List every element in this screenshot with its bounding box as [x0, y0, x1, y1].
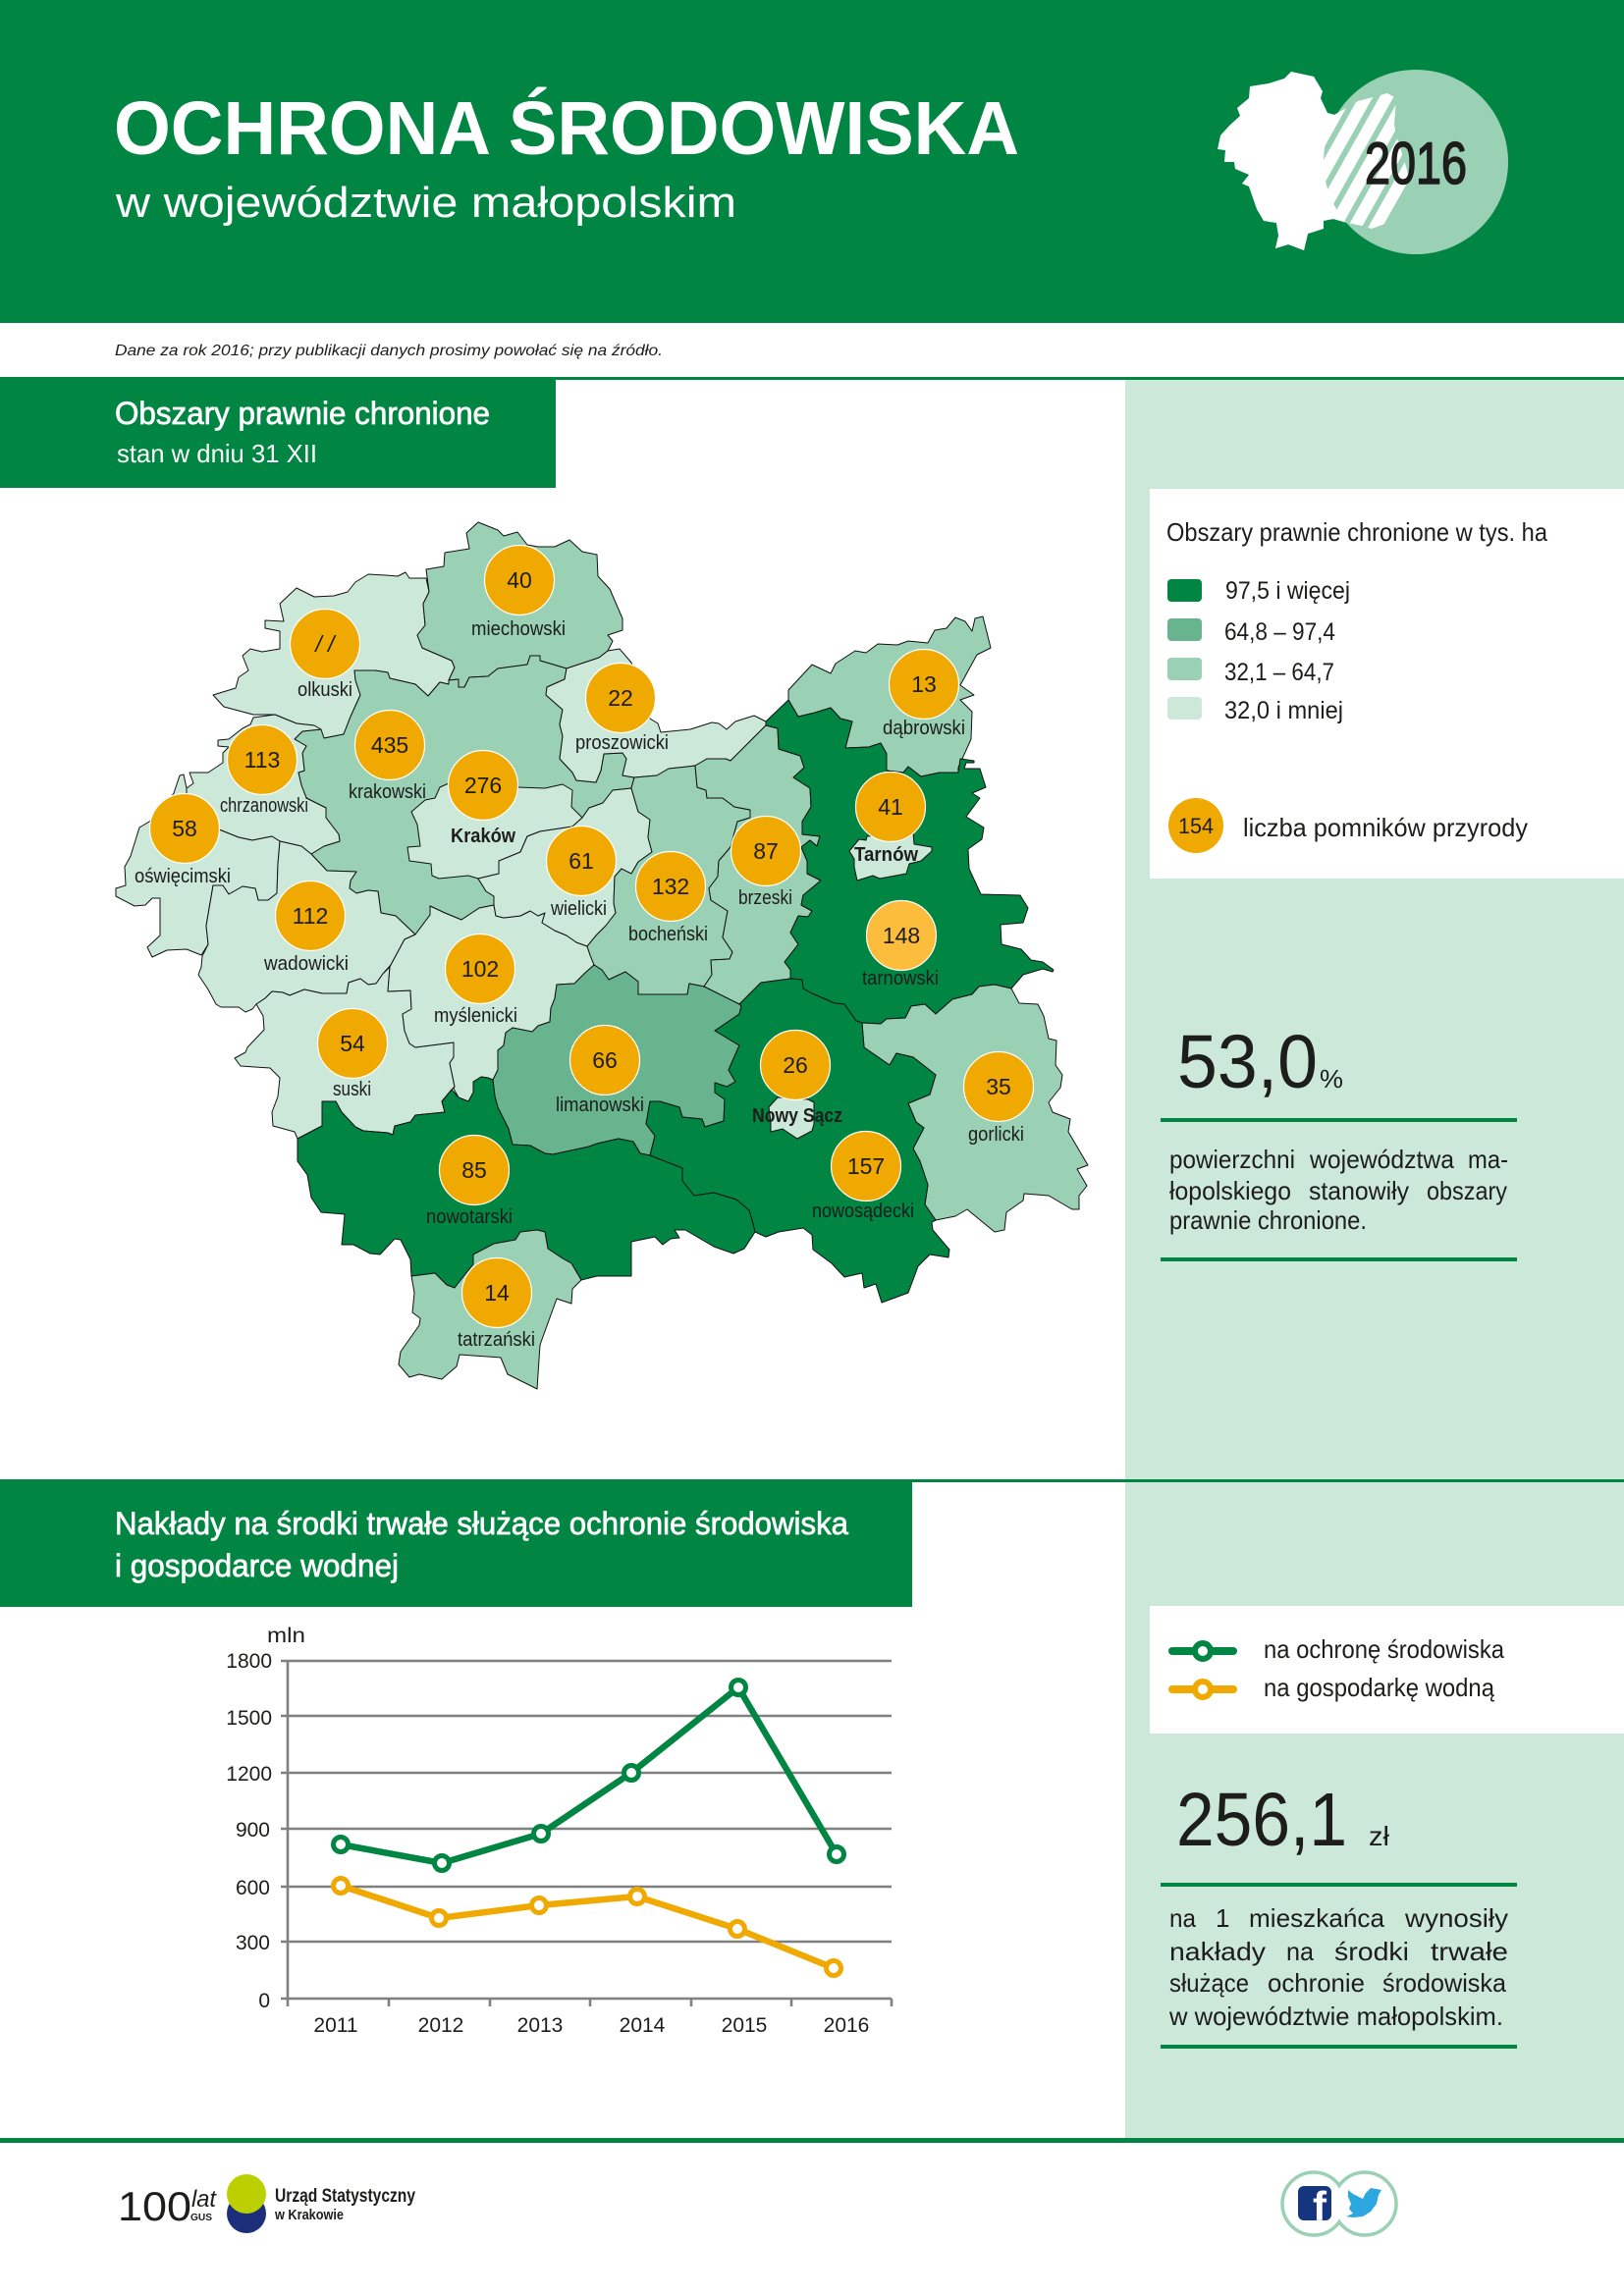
- county: dąbrowski: [788, 616, 991, 776]
- y axis labels: [226, 1650, 272, 2012]
- x axis labels: 2013: [517, 2014, 563, 2037]
- legend: map: 32,0 i mniej: [1224, 697, 1343, 724]
- county name labels: dąbrowski: [883, 718, 965, 739]
- badge: olkuski: [291, 609, 359, 679]
- badge: bocheński: [636, 852, 705, 921]
- badge: suski: 54: [340, 1031, 365, 1056]
- city name labels: Kraków: [451, 826, 515, 847]
- county: Nowy Sącz city: [769, 1097, 814, 1139]
- badge: tatrzański: [461, 1258, 532, 1327]
- source note: Dane za rok 2016; przy publikacji danych prosimy powołać się na źródło.: [115, 343, 663, 359]
- stat: 53,0%: prawnie chronione.: [1169, 1205, 1367, 1235]
- county: suski: [235, 967, 455, 1139]
- county name labels: oświęcimski: [135, 866, 231, 887]
- county name labels: myślenicki: [434, 1005, 517, 1027]
- legend: map: liczba pomników przyrody: [1243, 813, 1528, 842]
- stat: 256,1 zł: [1161, 1778, 1517, 2049]
- legend: map: 97,5 i więcej: [1225, 577, 1350, 605]
- stat: 53,0%: województwa: [1309, 1145, 1455, 1174]
- county: bocheński: [587, 766, 750, 994]
- badge: tatrzański: 14: [484, 1280, 510, 1306]
- county name labels: wielicki: [550, 898, 607, 920]
- badge: nowotarski: 85: [461, 1157, 487, 1183]
- county: wadowicki: [198, 841, 415, 1012]
- badge: dąbrowski: [890, 650, 958, 719]
- legend: map: [1150, 489, 1624, 879]
- badge: Nowy Sącz: [760, 1031, 831, 1099]
- badge: krakowski: 435: [371, 732, 408, 758]
- badge: chrzanowski: 113: [244, 747, 280, 773]
- series: ochrona środowiska: [334, 1681, 844, 1871]
- icons: social media: [1282, 2172, 1396, 2235]
- stat: 53,0%: łopolskiego: [1169, 1176, 1291, 1205]
- icon: region silhouette with 2016 badge: [1218, 70, 1508, 254]
- y axis labels: 300: [236, 1932, 270, 1954]
- footer logo: 100 lat GUS: GUS: [190, 2213, 212, 2223]
- county: nowotarski: [298, 1077, 755, 1288]
- footer logo: 100 lat GUS: [118, 2183, 217, 2229]
- county: olkuski: [213, 572, 455, 738]
- x axis labels: 2015: [722, 2014, 767, 2037]
- badge: nowotarski: [440, 1135, 509, 1205]
- y axis labels: 0: [258, 1990, 270, 2012]
- county name labels: chrzanowski: [220, 795, 308, 817]
- county: wielicki: [478, 788, 652, 946]
- badge: krakowski: [355, 711, 424, 779]
- x axis labels: 2012: [418, 2014, 463, 2037]
- badge: Nowy Sącz: 26: [783, 1052, 808, 1078]
- y axis labels: 1800: [226, 1650, 272, 1673]
- badge: limanowski: 66: [592, 1047, 618, 1073]
- city name labels: Nowy Sącz: [752, 1105, 842, 1127]
- badge: myślenicki: 102: [461, 956, 499, 982]
- footer logo: 100 lat GUS: 100: [118, 2183, 191, 2229]
- county name labels: olkuski: [298, 679, 352, 701]
- map value badges: [149, 546, 1033, 1327]
- stat: 256,1 zł: zł: [1369, 1821, 1390, 1851]
- stat: 53,0%: 53,0: [1177, 1020, 1318, 1104]
- footer logo: Urząd Statystyczny w Krakowie: [227, 2174, 415, 2233]
- stat: 53,0%: [1161, 1020, 1517, 1261]
- badge: limanowski: [569, 1025, 640, 1095]
- series: gospodarka wodna: [334, 1879, 840, 1975]
- badge: miechowski: 40: [507, 567, 532, 593]
- badge: oświęcimski: [149, 793, 220, 864]
- stat: 256,1 zł: środki: [1334, 1937, 1409, 1966]
- footer logo: Urząd Statystyczny w Krakowie: Urząd Statystyczny: [275, 2186, 415, 2207]
- stat: 256,1 zł: ochronie: [1268, 1968, 1365, 1998]
- county: tarnowski: [766, 700, 1054, 1024]
- heading: investment outlays: [0, 1482, 912, 1607]
- county: krakowski: [295, 656, 634, 934]
- badge: tarnowski: 148: [883, 923, 920, 948]
- badge: Kraków: [448, 750, 518, 821]
- right side panel background: [1125, 378, 1624, 2139]
- choropleth map of counties: [116, 522, 1088, 1389]
- legend: map: 64,8 – 97,4: [1224, 618, 1335, 646]
- county: miechowski: [417, 522, 623, 687]
- county name labels: miechowski: [471, 618, 566, 640]
- county name labels: krakowski: [349, 781, 426, 803]
- badge: olkuski: / /: [313, 631, 337, 657]
- heading: investment outlays: i gospodarce wodnej: [115, 1548, 399, 1583]
- badge: tarnowski: [866, 901, 937, 970]
- legend: chart: na ochronę środowiska: [1264, 1634, 1504, 1664]
- line chart: [226, 1625, 892, 2037]
- city name labels: [451, 826, 918, 1127]
- icon: facebook: f: [1313, 2183, 1327, 2229]
- badge: dąbrowski: 13: [911, 671, 937, 697]
- y axis labels: 900: [236, 1819, 270, 1842]
- county: Kraków city: [407, 783, 582, 879]
- stat: 256,1 zł: środowiska: [1382, 1968, 1507, 1998]
- county name labels: limanowski: [556, 1095, 644, 1116]
- stat: 53,0%: stanowiły: [1309, 1176, 1409, 1205]
- county name labels: proszowicki: [575, 732, 669, 754]
- badge: myślenicki: [446, 934, 514, 1003]
- stat: 53,0%: ma-: [1468, 1145, 1508, 1174]
- stat: 256,1 zł: trwałe: [1431, 1937, 1508, 1966]
- legend: chart: na gospodarkę wodną: [1264, 1673, 1494, 1702]
- footer logo: Urząd Statystyczny w Krakowie: w Krakowie: [274, 2207, 344, 2223]
- stat: 256,1 zł: wynosiły: [1404, 1903, 1508, 1933]
- badge: gorlicki: 35: [986, 1074, 1011, 1099]
- heading: protected areas: Obszary prawnie chronione: [115, 396, 490, 431]
- county: nowosądecki: [646, 979, 949, 1303]
- county name labels: wadowicki: [263, 953, 349, 975]
- county name labels: nowosądecki: [812, 1201, 914, 1222]
- stat: 53,0%: %: [1320, 1064, 1343, 1094]
- line chart: mln: [267, 1625, 305, 1647]
- county: tatrzański: [399, 1230, 581, 1389]
- badge: brzeski: 87: [753, 838, 779, 864]
- county: proszowicki: [546, 649, 766, 782]
- title: OCHRONA ŚRODOWISKA: [114, 86, 1019, 171]
- badge: oświęcimski: 58: [172, 816, 197, 841]
- stat: 256,1 zł: w województwie małopolskim.: [1168, 2002, 1503, 2031]
- stat: 256,1 zł: 256,1: [1176, 1778, 1347, 1862]
- legend: map: Obszary prawnie chronione w tys. ha: [1166, 517, 1547, 547]
- badge: wadowicki: 112: [293, 903, 328, 929]
- badge: nowosądecki: [831, 1131, 901, 1201]
- badge: nowosądecki: 157: [847, 1153, 885, 1179]
- header band: [0, 0, 1624, 323]
- legend: map: 32,1 – 64,7: [1224, 659, 1334, 686]
- badge: bocheński: 132: [652, 874, 689, 899]
- badge: suski: [318, 1009, 387, 1078]
- county name labels: gorlicki: [968, 1124, 1024, 1146]
- stat: 53,0%: obszary: [1427, 1176, 1507, 1205]
- county: brzeski: [695, 725, 821, 1004]
- stat: 256,1 zł: na: [1286, 1937, 1315, 1966]
- badge: wielicki: [546, 827, 617, 895]
- badge: wadowicki: [275, 881, 346, 950]
- stat: 53,0%: powierzchni: [1169, 1145, 1295, 1174]
- county: oświęcimski: [116, 774, 280, 957]
- county: limanowski: [493, 965, 741, 1155]
- x axis labels: [313, 2014, 869, 2037]
- icon: region silhouette with 2016 badge: 2016: [1365, 131, 1467, 196]
- badge: Tarnów: 41: [878, 794, 903, 820]
- y axis labels: 1500: [226, 1707, 272, 1730]
- heading: protected areas: stan w dniu 31 XII: [117, 439, 317, 468]
- county name labels: tarnowski: [862, 968, 939, 989]
- badge: chrzanowski: [228, 724, 297, 795]
- stat: 256,1 zł: nakłady: [1169, 1937, 1266, 1966]
- badge: Kraków: 276: [464, 773, 502, 798]
- y axis labels: 1200: [226, 1763, 272, 1786]
- stat: 256,1 zł: na: [1169, 1903, 1197, 1933]
- county name labels: tatrzański: [458, 1329, 535, 1351]
- county name labels: nowotarski: [426, 1206, 513, 1228]
- county: gorlicki: [862, 985, 1088, 1232]
- county: Tarnów city: [849, 832, 932, 881]
- badge: gorlicki: [964, 1052, 1033, 1121]
- stat: 256,1 zł: służące: [1169, 1968, 1249, 1998]
- county: chrzanowski: [187, 715, 340, 854]
- subtitle: w województwie małopolskim: [115, 179, 736, 227]
- heading: protected areas: [0, 378, 556, 488]
- x axis labels: 2016: [824, 2014, 869, 2037]
- legend: chart: [1150, 1606, 1624, 1734]
- icon: twitter: [1346, 2188, 1381, 2217]
- county name labels: bocheński: [628, 924, 708, 945]
- badge: proszowicki: [585, 664, 656, 732]
- stat: 256,1 zł: mieszkańca: [1249, 1903, 1385, 1933]
- badge: miechowski: [485, 546, 554, 614]
- legend: map: 154: [1178, 814, 1214, 838]
- footer logo: 100 lat GUS: lat: [191, 2186, 217, 2213]
- county name labels: suski: [333, 1079, 371, 1100]
- county name labels: [135, 618, 1024, 1351]
- county name labels: brzeski: [738, 887, 792, 909]
- x axis labels: 2014: [620, 2014, 666, 2037]
- county: myślenicki: [388, 905, 594, 1101]
- heading: investment outlays: Nakłady na środki trwałe służące ochronie środowiska: [115, 1506, 848, 1541]
- badge: Tarnów: [856, 772, 925, 842]
- badge: brzeski: [731, 817, 801, 885]
- stat: 256,1 zł: 1: [1216, 1903, 1229, 1933]
- x axis labels: 2011: [313, 2014, 358, 2037]
- badge: wielicki: 61: [568, 848, 594, 874]
- badge: proszowicki: 22: [608, 685, 633, 711]
- y axis labels: 600: [236, 1877, 270, 1899]
- city name labels: Tarnów: [854, 844, 918, 866]
